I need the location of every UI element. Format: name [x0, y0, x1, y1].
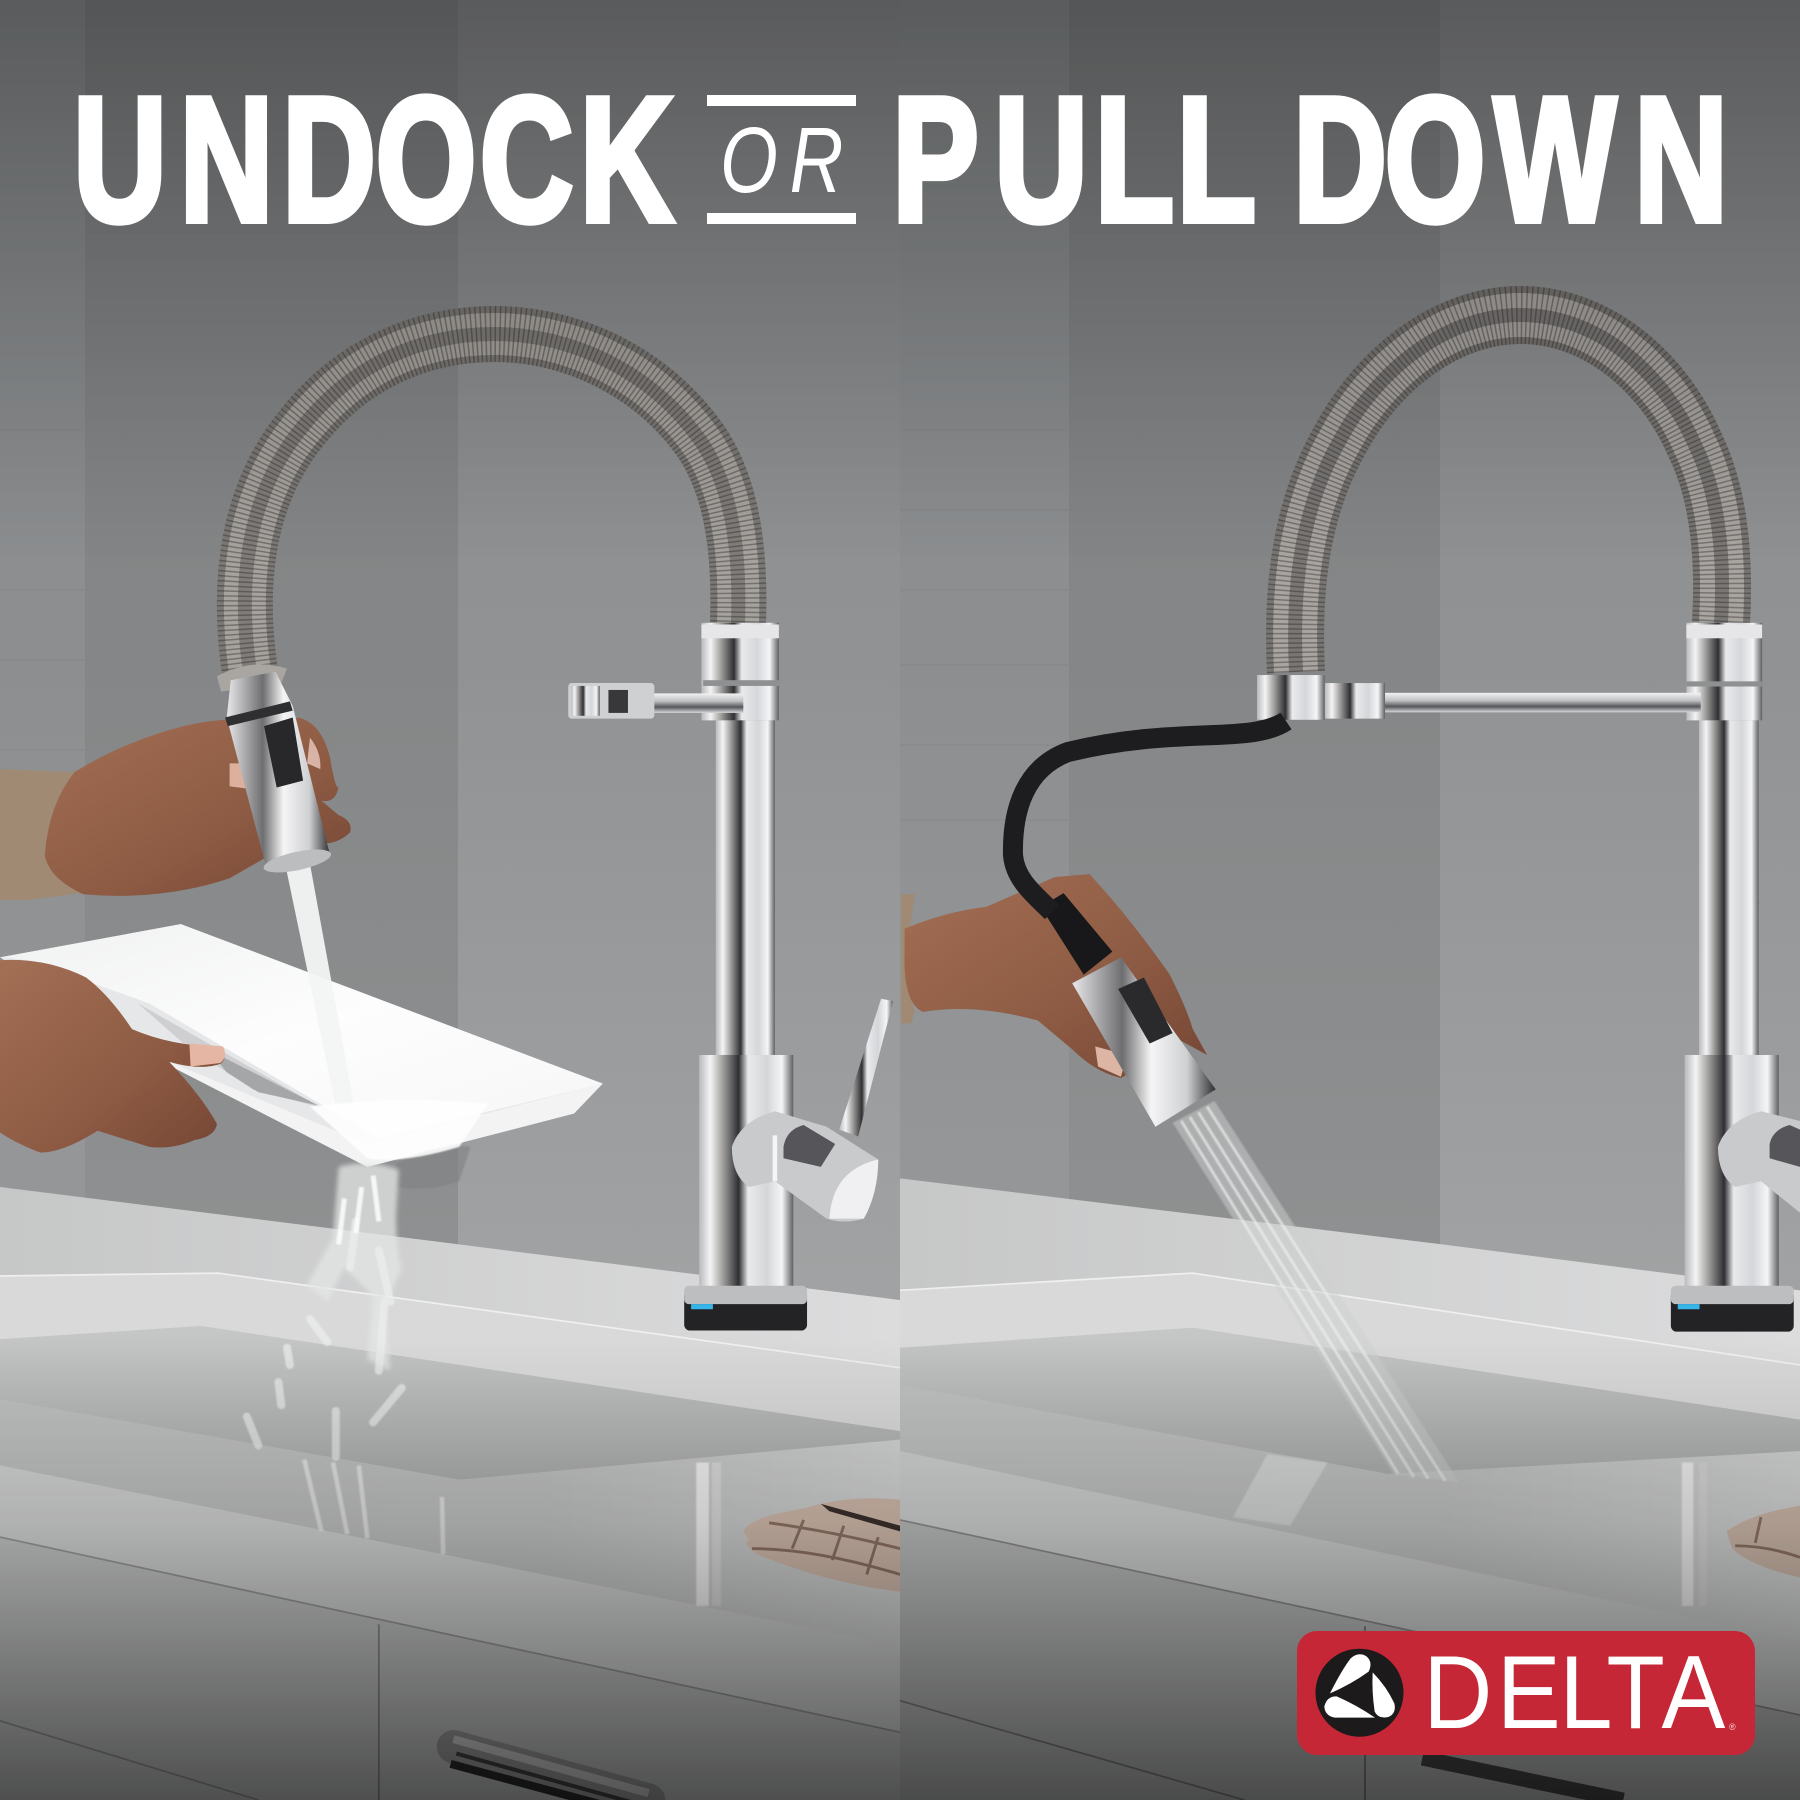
- or divider: [707, 95, 856, 224]
- head: [1072, 957, 1216, 1127]
- lever, right: [1718, 1111, 1800, 1213]
- registered mark: ®: [1729, 1722, 1736, 1732]
- left wall: [0, 0, 900, 1320]
- water stream left: [286, 864, 354, 1108]
- delta logo badge: [1297, 1631, 1755, 1755]
- right photo panel: pull down: [900, 0, 1800, 1800]
- left spray head: [217, 664, 333, 877]
- main falling water: [307, 1163, 402, 1371]
- wordmark: DELTA: [1423, 1635, 1726, 1751]
- lever handle: [732, 999, 893, 1221]
- title: [73, 61, 1728, 258]
- cabinet handle, right: [1422, 1758, 1623, 1800]
- icon: delta triangle mark: [1316, 1649, 1404, 1737]
- right hand and spray head: [901, 874, 1216, 1127]
- lower left hand: [0, 960, 225, 1153]
- dock arm and clip: [568, 683, 743, 719]
- shadowed water under the plate: [396, 1146, 471, 1189]
- faucet body: [699, 1055, 793, 1290]
- foam on the plate: [310, 1100, 488, 1160]
- connector: [1041, 893, 1112, 975]
- towel, left: [743, 1498, 900, 1592]
- towel, right: [1727, 1506, 1800, 1577]
- right faucet column and arm: [1257, 623, 1762, 904]
- cabinet handle: [451, 1739, 649, 1800]
- right faucet body: [1685, 1055, 1779, 1290]
- black pull-down hose: [1013, 721, 1286, 912]
- heading: pull down: PULL DOWN: [892, 61, 1728, 258]
- sleeve, right: [901, 894, 915, 1023]
- coil right: [1295, 315, 1722, 672]
- droplets: [247, 1176, 402, 1457]
- heading: undock: UNDOCK: [73, 61, 673, 258]
- left photo panel: undock: [0, 0, 900, 1800]
- dock arm: [1257, 675, 1701, 720]
- wrist and palm: [45, 718, 351, 896]
- sleeve: [0, 769, 83, 900]
- countertop reflections, left: [304, 1460, 721, 1606]
- or divider: OR: [720, 108, 843, 212]
- left countertop and sink: [0, 1187, 900, 1800]
- left faucet column: [568, 623, 781, 910]
- right countertop and sink: [900, 1178, 1800, 1800]
- countertop reflections, right: [1233, 1454, 1707, 1606]
- left plate: [0, 924, 603, 1167]
- water spray: [1173, 1101, 1460, 1483]
- hand: [904, 874, 1207, 1078]
- water splash left: [247, 1100, 488, 1457]
- right wall: [900, 0, 1800, 1320]
- upper hand with sleeve: [0, 718, 351, 900]
- hose left: coiled spring spout: [245, 334, 738, 672]
